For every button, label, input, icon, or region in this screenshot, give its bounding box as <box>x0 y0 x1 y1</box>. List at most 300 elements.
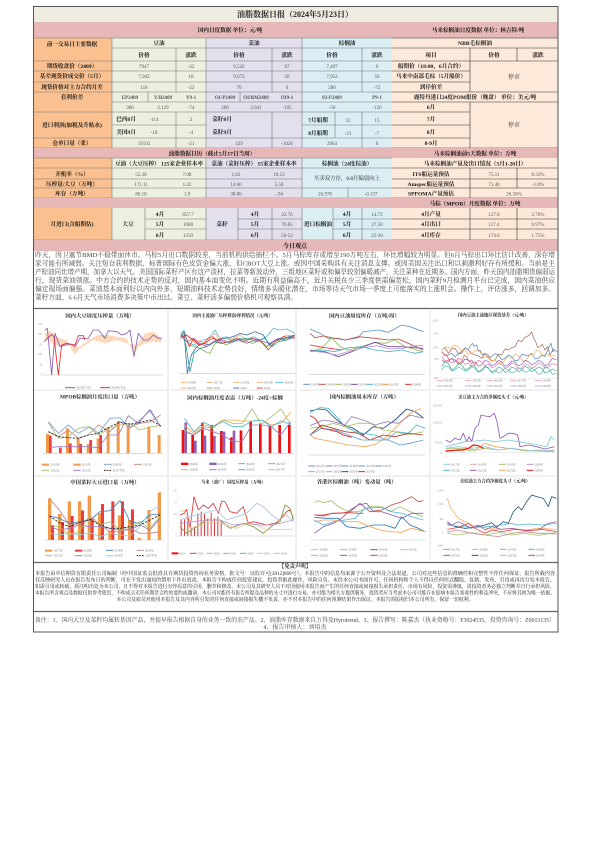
panel: monthly imports: 50-52 <box>281 234 293 239</box>
chart 11: palm oil inventory by port: 2020年 <box>379 547 388 552</box>
chart 9: China rapeseed and soybean imports: 2018年 <box>83 548 92 553</box>
text block: market commentary: 昨天，因卫塞节BMD不稳带面休市。马棕5月出口数据较差，当前机构供给抽栏不。5月马棕库存或增至190万吨左右，环比增幅较为明显。但6月马棕出口环比估计改善，深存增 <box>35 250 555 260</box>
panel: monthly imports: 14.72 <box>371 213 383 218</box>
chart 3: domestic soybean weekly inventory: 2023年 <box>390 381 399 386</box>
chart 8: US soybean oil futures net positions: 2024年 <box>534 467 543 472</box>
panel: Malaysian palm oil daily data: 马来中南部毛棕（5月船价） <box>396 72 466 80</box>
panel: domestic daily data: 67 <box>284 65 290 70</box>
panel: crush data: 棕榈油（24度棕油） <box>322 160 372 168</box>
chart 5: MPOB palm oil monthly export volume: 2019年 <box>82 462 91 467</box>
chart 1: domestic soybean weekly crush: 0 <box>41 374 43 377</box>
panel: domestic daily data: 巴西8月 <box>116 115 136 123</box>
panel: monthly imports: 5月 <box>251 220 259 228</box>
chart 11: palm oil inventory by port: 2022年 <box>319 552 328 557</box>
panel: Malaysian production and export: 马来棕榈油产量及出口情况（5月1-20日） <box>424 160 526 168</box>
chart 4: domestic soybean oil basis: 2019年 <box>444 383 453 388</box>
panel: MPOB monthly data: 4月库存 <box>421 231 441 239</box>
panel: domestic daily data: 7,497 <box>326 65 338 70</box>
panel: MPOB monthly data: 127.8 <box>488 213 500 218</box>
chart 2: domestic oilseed crush margin: 2021年 <box>187 385 196 390</box>
text block: market commentary: 家可能有所减弱。关注短仓获利数据，标普国际有色皮资金偏大涨，但CBOT大豆上涨。或因中国采购具有关注消息支撑。或因美国关注出口和以刺激利好存有所缓和。当前是主 <box>35 258 555 268</box>
chart 7: domestic palm oil weekly inventory: 2022年 <box>333 469 342 474</box>
chart 8: US soybean oil futures net positions: 50,000 <box>434 441 442 444</box>
panel: domestic daily data: 菜籽9月 <box>212 128 232 136</box>
heading: MPOB monthly data: 马棕（MPOB）月度数据 单位：万吨 <box>430 200 521 208</box>
panel: MPOB monthly data <box>392 198 558 240</box>
heading: today's comment <box>33 240 558 251</box>
chart 9: China rapeseed and soybean imports <box>45 478 163 558</box>
title <box>33 6 558 22</box>
chart 10: weekly crush volume: 2023 <box>197 551 204 555</box>
panel: domestic daily data: 03-P2409 <box>322 96 342 101</box>
chart 6: domestic palm oil monthly apparent consumption: 2017年 <box>276 467 285 472</box>
panel: domestic daily data: OI/RM2409 <box>243 96 269 101</box>
panel: domestic daily data: -32 <box>188 65 195 70</box>
chart 6: domestic palm oil monthly apparent consumption: 国内棕榈油月度表需（万吨）-24度+棕榈 <box>187 393 283 401</box>
panel: monthly imports: 70.85 <box>281 223 293 228</box>
chart 1: domestic soybean weekly crush: 2024年大豆 <box>111 385 126 390</box>
chart 10: weekly crush volume: 2018 <box>281 551 287 555</box>
chart 10: weekly crush volume: 0 <box>175 535 177 538</box>
chart 8: US soybean oil futures net positions: 250,000 <box>433 405 442 408</box>
chart 12: palm oil futures net positions: 2018年 <box>479 546 488 551</box>
panel: domestic daily data: 涨跌 <box>281 51 293 59</box>
panel: crush data <box>33 148 392 198</box>
panel: crush data: 7.08 <box>183 173 192 178</box>
panel: domestic daily data: -74 <box>188 106 195 111</box>
panel: crush data: 库存（万吨） <box>55 190 89 198</box>
chart 4: domestic soybean oil basis: 2015年 <box>472 378 481 383</box>
chart 6: domestic palm oil monthly apparent consumption: 2021年 <box>276 461 285 466</box>
panel: Malaysian palm oil daily data: 鹿特丹港口24度POM报价（晚盘） 单位：美元/吨 <box>414 93 537 101</box>
chart 2: domestic oilseed crush margin: 2016年 <box>187 379 196 384</box>
panel: crush data: 买卖双方存，6.8月偏弱向上 <box>314 174 381 182</box>
panel: domestic daily data <box>33 22 392 148</box>
chart 6: domestic palm oil monthly apparent consumption: 2023年 <box>218 461 227 466</box>
panel: domestic daily data: -1026 <box>281 142 293 147</box>
panel: domestic daily data: 价格 <box>326 51 338 59</box>
panel: domestic daily data: -21 <box>345 132 352 137</box>
chart 12: palm oil futures net positions: 2,500 <box>437 490 444 493</box>
text block: market commentary: 行，现货菜油领涨。中方合约的技术走势的反对，国内基本面变化不明。近期有利益偏高不，近月关税在少三季度供需偏宽松，国内菜籽9月检测月平台已完成，国内菜油供应 <box>35 276 555 286</box>
chart 9: China rapeseed and soybean imports: 2023年 <box>114 553 123 558</box>
panel: monthly imports: 5月 <box>156 220 164 228</box>
panel: Malaysian palm oil daily data <box>392 22 558 148</box>
panel: MPOB monthly data: 6.97% <box>532 223 544 228</box>
chart 8: US soybean oil futures net positions: 150,000 <box>433 421 442 424</box>
panel: Malaysian palm oil daily data: 停市 <box>508 121 520 129</box>
panel: crush data: 开机率（%） <box>55 170 89 178</box>
chart 8: US soybean oil futures net positions: 2019年 <box>507 461 516 466</box>
panel: monthly imports: 27.50 <box>371 223 383 228</box>
heading: today's comment: 今日观点 <box>283 242 308 250</box>
chart 9: China rapeseed and soybean imports: 2022年 <box>83 553 92 558</box>
chart 6: domestic palm oil monthly apparent consumption: 2022年 <box>246 461 255 466</box>
chart 12: palm oil futures net positions: -1,000 <box>436 545 444 548</box>
chart 7: domestic palm oil weekly inventory: 国内棕榈油周末库存（万吨） <box>330 392 399 400</box>
panel: domestic daily data: 进口利润(加税及升贴水) <box>42 121 102 129</box>
panel: domestic daily data: 仓单口量（张） <box>52 139 92 147</box>
panel: Malaysian palm oil daily data: 7月 <box>427 115 435 123</box>
chart 8: US soybean oil futures net positions: 2018年 <box>478 461 487 466</box>
panel: domestic daily data: 前一交易日主要数据 <box>47 40 98 48</box>
chart 4: domestic soybean oil basis <box>432 311 558 388</box>
chart 2: domestic oilseed crush margin: 2017年 <box>214 379 223 384</box>
panel: Malaysian palm oil daily data: 到岸价差 <box>420 83 443 91</box>
chart 1: domestic soybean weekly crush: 国内大豆周度压榨量（万吨） <box>65 312 135 320</box>
panel: crush data: 豆油（大豆压榨） 125家企业样本率 <box>115 160 203 168</box>
panel: domestic daily data: 70 <box>236 86 242 91</box>
footnote: 备注：1、国内大豆及菜籽均属转基因产品，并提早报告根据自身的业务一致的农产品。2、油脂库存数据来自万得及Hyrotrend。3、报告撰写：陈嘉杰（执业资格号：F3024535，投资咨询号：Z0013135） <box>35 616 555 624</box>
panel: domestic daily data: -4 <box>189 131 194 136</box>
panel: domestic daily data: 50 <box>284 75 290 80</box>
chart 7: domestic palm oil weekly inventory: 2019年 <box>366 463 375 468</box>
title: 油脂数据日报（2024年5月23日） <box>237 9 353 19</box>
panel: domestic daily data: P9-1 <box>372 96 382 101</box>
panel: Malaysian production and export: 26.36% <box>506 192 522 198</box>
disclaimer: 本公司及雇员对使用本报告及其内容所引发的任何直接或间接损失概不负责，亦不对本报告中的任何预测结果作出保证，本报告的版权归本公司所有，保留一切权利。 <box>116 596 474 603</box>
chart 2: domestic oilseed crush margin: 2023 <box>241 386 247 390</box>
panel: domestic daily data: 280 <box>328 86 336 91</box>
chart 5: MPOB palm oil monthly export volume <box>42 392 163 472</box>
chart 9: China rapeseed and soybean imports: 五年平均 <box>145 553 157 558</box>
panel: domestic daily data: 2.041 <box>250 106 262 111</box>
panel: monthly imports: 6月 <box>343 231 351 239</box>
panel: domestic daily data: 涨跌 <box>185 51 197 59</box>
chart 10: weekly crush volume: 2019 <box>264 551 270 555</box>
chart 7: domestic palm oil weekly inventory <box>308 392 425 474</box>
chart 2: domestic oilseed crush margin: 2019年 <box>264 379 273 384</box>
panel: monthly imports: 4月 <box>156 210 164 218</box>
chart 12: palm oil futures net positions <box>436 477 557 557</box>
panel: monthly imports: 857.7 <box>182 213 194 218</box>
chart 10: weekly crush volume: 马来（油厂）周度压榨量（万吨） <box>201 479 266 486</box>
text block: market commentary: 菜籽方面，6 6月天气市场消费多决策中市出过。菜豆、菜籽活多偏弱价格机可观察具满。 <box>35 292 297 302</box>
chart 7: domestic palm oil weekly inventory: 2023年 <box>349 469 358 474</box>
panel: crush data: 26.978 <box>318 192 332 198</box>
panel: domestic daily data: Y9-1 <box>186 96 197 101</box>
chart 8: US soybean oil futures net positions: 美豆油主力合约净额度头寸（元/吨） <box>458 393 529 400</box>
chart 4: domestic soybean oil basis: 2022年 <box>517 383 526 388</box>
panel: monthly imports <box>33 198 392 240</box>
chart 7: domestic palm oil weekly inventory: 2018年 <box>349 463 358 468</box>
panel: Malaysian production and export: 8.33% <box>532 173 544 178</box>
chart 3: domestic soybean weekly inventory: 2024年 <box>412 381 421 386</box>
panel: MPOB monthly data: 1.75% <box>532 234 544 239</box>
panel: crush data: 38.86 <box>230 192 242 198</box>
disclaimer <box>35 562 555 603</box>
panel: Malaysian palm oil daily data: 价格 <box>488 51 500 59</box>
panel: Malaysian production and export: -1.8% <box>532 183 544 188</box>
panel: crush data: 86.18 <box>135 192 147 198</box>
panel: domestic daily data: 206 <box>221 106 229 111</box>
panel: domestic daily data: OI9-1 <box>281 96 294 101</box>
panel: domestic daily data: OI-P2409 <box>215 96 236 101</box>
panel: MPOB monthly data: 117.4 <box>488 223 500 228</box>
chart 12: palm oil futures net positions: 0 <box>442 531 444 534</box>
chart 8: US soybean oil futures net positions <box>433 393 556 472</box>
panel: domestic daily data: -7 <box>375 132 380 137</box>
chart 4: domestic soybean oil basis: 2016年 <box>494 378 503 383</box>
panel: Malaysian production and export: SPPOMA产量预估 <box>408 190 454 198</box>
chart 10: weekly crush volume: 2020 <box>247 551 254 555</box>
chart 1: domestic soybean weekly crush: 50 <box>39 364 43 367</box>
chart 1: domestic soybean weekly crush: 100 <box>38 353 43 356</box>
chart 1: domestic soybean weekly crush: 250 <box>38 323 43 326</box>
panel: Malaysian production and export: ITS船运量预估 <box>412 170 450 178</box>
chart 4: domestic soybean oil basis: 1,500 <box>432 332 439 335</box>
chart 12: palm oil futures net positions: 2017年 <box>451 546 460 551</box>
panel: domestic daily data: 118 <box>140 86 148 91</box>
panel: domestic daily data: 期货收盘价（2409） <box>47 62 97 70</box>
chart 5: MPOB palm oil monthly export volume: 2020年 <box>113 462 122 467</box>
chart 4: domestic soybean oil basis: 1,000 <box>432 346 439 349</box>
chart 1: domestic soybean weekly crush: 150 <box>38 344 43 347</box>
chart 3: domestic soybean weekly inventory: 国内豆油周度库存（万吨/周） <box>329 312 400 320</box>
disclaimer: 如需引用或转载，须注明出处为本公司，且不得对本报告进行有悖原意的引用、删节和修改。本公司及其研究人员不对因使用本报告而产生的任何直接或间接损失承担责任，市场有风险，投资需谨慎，请投资者务必独立判断并自行承担风险， <box>35 583 555 590</box>
panel: domestic daily data: 价格 <box>138 51 150 59</box>
footnote: 4、报告审核人：刘培杰 <box>263 623 327 631</box>
panel: Malaysian palm oil daily data: 项目 <box>425 51 437 59</box>
chart 8: US soybean oil futures net positions: 2017年 <box>451 461 460 466</box>
disclaimer: 仅反映研究人员在报告发布日的判断，可在不发出通知的情形下作出更改。本报告不构成任何投资建议，投资者据此操作，风险自负。未经本公司书面许可，任何机构和个人不得以任何形式翻版、复制、发布、引用或再次分发本报告， <box>35 576 555 584</box>
panel: domestic daily data: 50 <box>374 75 380 80</box>
panel: Malaysian palm oil daily data: NBB毛棕榈油 <box>458 39 492 47</box>
disclaimer: 【免责声明】 <box>279 562 311 570</box>
heading: Malaysian palm oil daily data: 马来棕榈油日度数据 单位：林吉特/吨 <box>432 26 525 34</box>
panel: crush data: 171.11 <box>134 183 148 188</box>
chart 6: domestic palm oil monthly apparent consumption: 2018年 <box>246 467 255 472</box>
panel: Malaysian production and export: 73.40 <box>488 183 500 188</box>
panel: crush data: 18.53 <box>273 173 285 178</box>
chart 4: domestic soybean oil basis: 国内豆油主流地区现货基差（元/吨） <box>458 311 529 318</box>
panel: monthly imports: 大豆 <box>122 220 134 228</box>
heading: crush data: 油脂数据日历（截止5月17日当周） <box>169 150 255 158</box>
panel: monthly imports: 月进口(含船期估) <box>51 220 94 228</box>
chart 2: domestic oilseed crush margin: 2022 <box>214 386 220 390</box>
panel: Malaysian palm oil daily data: 8-9月 <box>424 139 438 147</box>
panel: monthly imports: 6月 <box>251 231 259 239</box>
panel: monthly imports: 22.76 <box>281 213 293 218</box>
panel: domestic daily data: EP2409 <box>122 96 139 101</box>
panel: domestic daily data: 涨跌 <box>371 51 383 59</box>
chart 4: domestic soybean oil basis: 2023年 <box>542 383 551 388</box>
chart 7: domestic palm oil weekly inventory: 2021年 <box>316 469 325 474</box>
panel: domestic daily data: -105 <box>282 106 292 111</box>
panel: crush data: 1.9 <box>184 192 191 198</box>
chart 3: domestic soybean weekly inventory: 2019年 <box>326 381 335 386</box>
panel: domestic daily data: 429 <box>235 142 243 147</box>
chart 5: MPOB palm oil monthly export volume: 2023年 <box>82 467 91 472</box>
panel: crush data: 1.63 <box>232 173 241 178</box>
chart 12: palm oil futures net positions: 美棕油主力合约净额度头寸（元/吨） <box>460 477 530 484</box>
footnote <box>35 616 555 631</box>
panel: domestic daily data: 6 <box>376 65 379 70</box>
chart 10: weekly crush volume: 2021 <box>231 551 237 555</box>
chart 3: domestic soybean weekly inventory: 2018年 <box>311 381 320 386</box>
chart 4: domestic soybean oil basis: 2,000 <box>432 320 439 323</box>
chart 4: domestic soybean oil basis: 500 <box>434 358 439 361</box>
chart 4: domestic soybean oil basis: 2020年 <box>472 383 481 388</box>
chart 8: US soybean oil futures net positions: 2020年 <box>534 461 543 466</box>
chart 11: palm oil inventory by port: 各港区棕榈油（吨）变动量（吨） <box>317 477 397 485</box>
chart 2: domestic oilseed crush margin: 2020年 <box>285 379 294 384</box>
chart 7: domestic palm oil weekly inventory: 2017年 <box>333 463 342 468</box>
panel: domestic daily data: 菜油 <box>248 39 260 47</box>
chart 6: domestic palm oil monthly apparent consumption: 2020年 <box>189 467 198 472</box>
chart 3: domestic soybean weekly inventory: 2020年 <box>342 381 351 386</box>
chart 9: China rapeseed and soybean imports: 2020年 <box>145 548 154 553</box>
panel: monthly imports: 菜籽 <box>216 220 228 228</box>
panel: domestic daily data: -72 <box>374 86 381 91</box>
panel: domestic daily data: 380 <box>126 106 134 111</box>
panel: monthly imports: 4月 <box>343 210 351 218</box>
panel: domestic daily data: 7月船期 <box>308 116 328 124</box>
chart 4: domestic soybean oil basis: 2014年 <box>444 378 453 383</box>
chart 3: domestic soybean weekly inventory: 2022年 <box>374 381 383 386</box>
chart 11: palm oil inventory by port: 2019年 <box>348 547 357 552</box>
text block: market commentary: 偏定现场面偏强。菜油基本面利好以内向外多，短期油料技术走势良好，情绪多头暖化潜在，市场等待天气市场一季度上可能落实的上涨机会。操作上，评估涨多，回调加多。 <box>35 284 555 294</box>
chart 10: weekly crush volume: 20 <box>174 490 177 493</box>
chart 5: MPOB palm oil monthly export volume: 2018年 <box>51 462 60 467</box>
chart 10: weekly crush volume: 15 <box>174 501 177 504</box>
chart 4: domestic soybean oil basis: 2021年 <box>494 383 503 388</box>
panel: domestic daily data: 豆油 <box>153 39 165 47</box>
panel: crush data: 14.60 <box>230 183 242 188</box>
panel: MPOB monthly data: 4月产量 <box>421 210 441 218</box>
panel: crush data: 菜油（菜籽压榨） 15家企业样本率 <box>211 160 297 168</box>
chart 11: palm oil inventory by port <box>311 477 425 557</box>
panel: monthly imports: 6月 <box>156 231 164 239</box>
chart 12: palm oil futures net positions: 2024年 <box>536 552 545 557</box>
chart 8: US soybean oil futures net positions: 2023年 <box>507 467 516 472</box>
panel: monthly imports: 4月 <box>251 210 259 218</box>
panel: domestic daily data: 7947 <box>139 65 150 70</box>
chart 12: palm oil futures net positions: 500 <box>439 518 444 521</box>
chart 4: domestic soybean oil basis: 2017年 <box>517 378 526 383</box>
chart 6: domestic palm oil monthly apparent consumption: 2024年 <box>189 461 198 466</box>
panel: domestic daily data: 10 <box>188 75 194 80</box>
chart 6: domestic palm oil monthly apparent consumption <box>180 393 293 472</box>
panel: Malaysian palm oil daily data: 8月 <box>427 128 435 136</box>
panel: crush data: 55.38 <box>135 173 147 178</box>
panel: domestic daily data: -50 <box>329 106 336 111</box>
disclaimer: 本报告所含观点及数据仅供参考使用，不构成买卖任何期货合约的要约或邀请，本公司可能持有报告所提及品种的头寸并进行交易，亦可能为相关方提供服务，投资者应当考虑本公司可能存在影响本报告客观性的利益冲突，不应将其视为唯一依据。 <box>35 590 555 596</box>
chart 1: domestic soybean weekly crush: 2023年大豆 <box>76 385 91 390</box>
chart 2: domestic oilseed crush margin: 国内主流油厂压榨利润/榨利情况（元/吨） <box>193 312 273 319</box>
panel: domestic daily data: 现货价格对主力合约月差 <box>41 83 103 91</box>
chart 9: China rapeseed and soybean imports: 2019年 <box>114 548 123 553</box>
panel: domestic daily data: 2 <box>190 118 193 123</box>
panel: Malaysian palm oil daily data: 6月 <box>427 103 435 111</box>
panel: MPOB monthly data: 4月出口 <box>421 220 441 228</box>
panel: MPOB monthly data: 2.76% <box>532 213 544 218</box>
panel: monthly imports: 进口棕榈油 <box>304 220 332 228</box>
chart 11: palm oil inventory by port: 2024年 <box>379 552 388 557</box>
chart 1: domestic soybean weekly crush <box>38 312 163 390</box>
panel: domestic daily data: 套利价差 <box>61 93 84 101</box>
panel: domestic daily data: -22 <box>188 86 195 91</box>
text block: market commentary <box>35 250 555 302</box>
chart 12: palm oil futures net positions: 2021年 <box>451 552 460 557</box>
panel: MPOB monthly data: 174.6 <box>488 234 500 239</box>
heading: domestic daily data: 国内日度数据 单位：元/吨 <box>198 26 263 34</box>
panel: domestic daily data: 8月船期 <box>308 129 328 137</box>
text block: market commentary: 产棕油同比增产期，加拿大以天气。美国国际菜籽产区有这产淡材，拉菜等新波动外，三组地区菜籽或和偏旱较别偏暖减产，关注菜种在近期多。国内方面，昨天国内油脂期货偏弱运 <box>35 267 555 277</box>
chart 10: weekly crush volume <box>172 479 295 555</box>
panel: domestic daily data: 2964 <box>327 142 338 147</box>
chart 4: domestic soybean oil basis: 2018年 <box>542 378 551 383</box>
chart 5: MPOB palm oil monthly export volume: 2022年 <box>51 467 60 472</box>
chart 2: domestic oilseed crush margin: 2024 <box>264 386 270 390</box>
chart 5: MPOB palm oil monthly export volume: 五年平均 <box>113 467 125 472</box>
panel: Malaysian production and export: Amspec船运量预估 <box>408 180 455 188</box>
chart 12: palm oil futures net positions: 1,500 <box>437 503 444 506</box>
panel: monthly imports: 22-30 <box>371 234 383 239</box>
panel: domestic daily data: -114 <box>150 118 159 123</box>
chart 5: MPOB palm oil monthly export volume: 2021年 <box>143 462 152 467</box>
chart 6: domestic palm oil monthly apparent consumption: 2019年 <box>218 467 227 472</box>
panel: domestic daily data: 美国9月 <box>116 128 136 136</box>
panel: domestic daily data: -126 <box>372 106 382 111</box>
panel: domestic daily data: -21 <box>188 142 195 147</box>
panel: domestic daily data: 9,672 <box>233 75 245 80</box>
chart 10: weekly crush volume: 2024 <box>179 551 185 555</box>
chart 9: China rapeseed and soybean imports: 2021年 <box>54 553 63 558</box>
panel: monthly imports: 1000 <box>183 223 194 228</box>
panel: Malaysian production and export <box>392 148 558 198</box>
chart 3: domestic soybean weekly inventory: 2021年 <box>358 381 367 386</box>
chart 7: domestic palm oil weekly inventory: 2016年 <box>316 463 325 468</box>
panel: domestic daily data: 9,542 <box>233 65 245 70</box>
panel: crush data: 1.42 <box>183 183 192 188</box>
panel: Malaysian palm oil daily data: 涨跌 <box>532 51 544 59</box>
panel: Malaysian palm oil daily data: 船期价（18:00，6月合约） <box>398 62 464 71</box>
chart 12: palm oil futures net positions: 2020年 <box>536 546 545 551</box>
panel: domestic daily data: 7,952 <box>326 75 338 80</box>
heading: Malaysian high frequency data: 马来棕榈油前5天数据 单位：万吨 <box>434 150 517 158</box>
panel: domestic daily data: 棕榈油 <box>339 39 356 47</box>
chart 12: palm oil futures net positions: 2023年 <box>508 552 517 557</box>
panel: crush data: -.94 <box>275 192 283 198</box>
chart 3: domestic soybean weekly inventory <box>303 312 425 386</box>
chart 10: weekly crush volume: 10 <box>174 513 177 516</box>
disclaimer: 本报告由中信期货有限责任公司编制（经中国证监会批准具有期货投资咨询业务资格，批文号：证监许可[2012]669号）。本报告中的信息均来源于公开资料及合法渠道，公司对这些信息的准确性和完整性不作任何保证，报告所载内容 <box>35 570 555 577</box>
panel: monthly imports: 1250 <box>183 234 194 239</box>
panel: monthly imports: 5月 <box>343 220 351 228</box>
chart 4: domestic soybean oil basis: -500 <box>433 377 439 380</box>
panel: crush data: -0.137 <box>365 192 378 198</box>
chart 11: palm oil inventory by port: 2018年 <box>319 547 328 552</box>
panel: Malaysian palm oil daily data: 停市 <box>508 73 520 81</box>
panel: domestic daily data: 基差现货价成交价（5月） <box>40 72 104 80</box>
chart 9: China rapeseed and soybean imports: 中国菜籽大豆进口量（万吨） <box>70 478 140 486</box>
chart 8: US soybean oil futures net positions: 2021年 <box>451 467 460 472</box>
chart 12: palm oil futures net positions: 2019年 <box>508 546 517 551</box>
panel: domestic daily data: 0 <box>286 86 289 91</box>
panel: domestic daily data: Y/B2409 <box>154 96 173 101</box>
chart 11: palm oil inventory by port: 2023年 <box>348 552 357 557</box>
chart 7: domestic palm oil weekly inventory: 2024年 <box>366 469 375 474</box>
panel: domestic daily data: 7,942 <box>138 75 150 80</box>
panel: domestic daily data: 2.129 <box>157 106 169 111</box>
panel: domestic daily data: 价格 <box>233 51 245 59</box>
chart 8: US soybean oil futures net positions: 2022年 <box>478 467 487 472</box>
panel: domestic daily data: 15 <box>374 119 380 124</box>
chart 2: domestic oilseed crush margin: 2018年 <box>241 379 250 384</box>
chart 1: domestic soybean weekly crush: 200 <box>38 333 43 336</box>
chart 5: MPOB palm oil monthly export volume: MPOB棕榈油月度出口量（万吨） <box>60 392 140 400</box>
